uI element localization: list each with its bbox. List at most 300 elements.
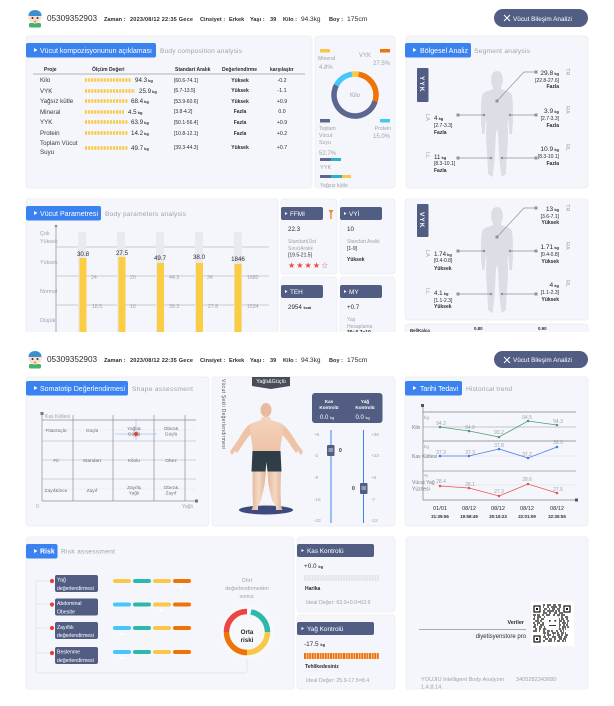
segment values: 1.74 kg (434, 251, 452, 258)
slider: muscle control: 0 (339, 448, 342, 454)
table rows: 94.3 kg (135, 77, 153, 84)
table rows: 63.9 kg (131, 119, 149, 126)
FFMI values: Sınır)Aralık (288, 246, 314, 252)
slider: muscle control: -16 (314, 497, 321, 502)
tab heading (405, 43, 471, 58)
somatotype grid: 0 (36, 504, 39, 510)
donut labels: 4.8% (319, 65, 333, 71)
side label (417, 68, 428, 102)
segment values: Yüksek (434, 266, 452, 272)
line chart: Vücut Yağ (412, 480, 435, 486)
button: body composition analysis (494, 351, 588, 368)
line chart: 94.2 (436, 421, 446, 427)
line chart: 22:01:09 (518, 514, 536, 519)
table rows (40, 77, 287, 156)
somatotype grid: Zayıf& (127, 485, 142, 491)
line chart: 38.0 (553, 440, 563, 446)
slider: fat control: -22 (371, 518, 378, 523)
MY values: 39+0.7x10 (347, 330, 371, 336)
ribbon: body type: Yağlı&Güçlü (256, 379, 286, 385)
table rows: +0.9 (277, 99, 287, 105)
table header: Proje (44, 67, 57, 73)
slider: fat control: +23 (371, 453, 379, 458)
segment values: [8.3-10.1] (434, 161, 456, 167)
bar chart: Düşük (40, 318, 56, 324)
risk rows: Yağ (57, 578, 66, 584)
line chart: 94.5 (522, 415, 532, 421)
line chart: 94.0 (465, 425, 475, 431)
line chart: 08/12 (550, 506, 564, 512)
donut labels: Mineral (318, 56, 335, 62)
table rows: Fazla (234, 120, 246, 126)
table rows: Yüksek (231, 99, 249, 105)
segment labels: RA (564, 106, 570, 114)
measurement summary: 175cm (347, 357, 368, 364)
measurement summary: Boy : (329, 17, 343, 23)
line chart: 28.4 (436, 479, 446, 485)
segment values: Fazla (546, 161, 559, 167)
measurement summary: Cinsiyet : (200, 358, 225, 364)
panel: body shape (212, 377, 395, 526)
somatotype grid: Zayıf&İnce (45, 487, 68, 494)
donut labels: Yağsız kütle (320, 183, 348, 189)
table rows: [10.8-12.1] (174, 131, 199, 137)
subheading: Risk assessment (61, 548, 115, 556)
icon: QR code (531, 602, 574, 646)
body silhouette (481, 207, 513, 313)
line chart: 28.1 (465, 482, 475, 488)
connector tree (36, 581, 247, 673)
risk rows: değerlendirmesi (57, 633, 94, 639)
donut labels: 15.0% (373, 134, 391, 140)
leader lines (456, 206, 538, 296)
tab heading: Somatotip Değerlendirmesi (40, 386, 125, 393)
donut labels (318, 49, 391, 189)
table rows: Yüksek (231, 88, 249, 94)
somatotype grid: Zayıf (166, 490, 177, 496)
bar chart: 10 (130, 304, 136, 310)
line chart: 08/12 (462, 506, 476, 512)
table rows: 25.9 kg (139, 88, 157, 95)
tab heading: Vücut kompozisyonunun açıklaması (40, 48, 152, 55)
ideal value: İdeal Değer: 25.9-17.5=8.4 (306, 677, 369, 684)
risk donut: riski (241, 637, 254, 644)
VYI values: Yüksek (347, 257, 365, 263)
header: page one (28, 9, 588, 28)
table rows: VYK (40, 88, 53, 95)
bar chart (40, 225, 269, 332)
segment labels: LA (424, 114, 430, 121)
panel: MY (340, 277, 395, 339)
measurement summary: 2023/08/12 22:35 Gece (130, 358, 193, 364)
risk rows: Beslenme (57, 650, 80, 656)
illustration: body model (230, 403, 303, 514)
risk donut: Orta (241, 629, 254, 636)
line chart: 19:58:49 (460, 514, 478, 519)
panel: waist-hip ratio (405, 324, 588, 340)
measurement summary: 2023/08/12 22:35 Gece (130, 17, 193, 23)
caption (225, 578, 269, 600)
somatotype grid: Obez (165, 458, 177, 464)
segment values: [8.3-10.1] (538, 154, 560, 160)
progress bar (304, 575, 379, 581)
subheading: Historical trend (466, 386, 512, 393)
measurement summary: Boy : (329, 358, 343, 364)
subheading: Segment analysis (474, 48, 531, 55)
segment values: Fazla (434, 130, 447, 136)
donut labels: 52.7% (319, 151, 337, 157)
segment labels (424, 68, 570, 158)
value: -17.5 kg (304, 641, 326, 648)
tab heading (26, 544, 58, 558)
measurement summary: 94.3kg (301, 16, 321, 23)
line chart: 01/01 (433, 506, 447, 512)
measurement summary (104, 16, 368, 23)
segment values: Fazla (546, 84, 559, 90)
donut labels: Kilo (350, 93, 361, 99)
FFMI values: Standart(Üst (288, 238, 317, 245)
subheading: Body composition analysis (160, 48, 243, 55)
FFMI values: [19.5-21.5] (288, 252, 313, 258)
line chart: 93.2 (494, 430, 504, 436)
table rows: -0.2 (278, 78, 287, 84)
table rows: Kilo (40, 77, 51, 84)
panel: historical trend (405, 377, 588, 526)
bar chart: 1534 (247, 304, 259, 310)
data label: Veriler (508, 620, 525, 626)
table rows: +0.9 (277, 120, 287, 126)
caption: sonra: (240, 594, 254, 600)
segment values: [0.4-0.8] (434, 258, 453, 264)
risk rows: Abdominal (57, 601, 82, 607)
side label (417, 204, 428, 237)
control summary: Yağ (361, 399, 369, 404)
segment values: [2.7-3.3] (541, 116, 560, 122)
somatotype grid: Kilolu (128, 458, 140, 464)
somatotype grid: Standart (83, 458, 102, 464)
slider: fat control: +8 (371, 475, 377, 480)
icon: avatar (28, 351, 42, 368)
bar chart: 20 (130, 275, 136, 281)
line chart: % (424, 473, 429, 479)
line chart: 94.3 (553, 419, 563, 425)
table header: Ölçüm Değeri (92, 66, 125, 73)
risk rows: Obesite (57, 610, 75, 616)
table rows: [53.9-60.6] (174, 99, 199, 105)
VYI values (347, 226, 380, 263)
subheading: Shape assessment (132, 386, 193, 393)
tab heading: VYİ (349, 209, 360, 218)
table rows: Toplam Vücut (40, 140, 78, 147)
bar chart: 44.3 (169, 275, 179, 281)
segment labels: TR (564, 204, 570, 211)
line chart: 22:35:55 (548, 514, 566, 519)
segment labels: RA (564, 242, 570, 250)
somatotype grid: Yağlı (129, 490, 139, 496)
segment values: 4 kg (550, 282, 560, 289)
line chart: 08/12 (491, 506, 505, 512)
somatotype grid: Obez& (164, 485, 179, 491)
vertical label: Vücut Şekli Değerlendirmesi (220, 379, 226, 449)
table rows: Fazla (234, 109, 246, 115)
table rows: +0.7 (277, 145, 287, 151)
bar chart: 27.8 (208, 304, 218, 310)
bar chart: 30.8 (77, 251, 90, 258)
donut labels: Protein (375, 126, 391, 132)
panel: segment analysis YYK (405, 36, 588, 188)
measurement summary: Erkek (229, 17, 245, 23)
button: body composition analysis: Vücut Bileşim Analizi (513, 16, 572, 23)
measurement summary: Yaşı : (250, 358, 265, 364)
panel: VYI (340, 199, 395, 274)
somatotype grid (36, 412, 198, 510)
segment values: [1.1-2.3] (434, 298, 453, 304)
somatotype grid: Kas Kütlesi (45, 414, 70, 420)
table rows: 68.4 kg (131, 98, 149, 105)
segment values: 4.1 kg (434, 290, 449, 297)
risk rows: değerlendirmesi (57, 658, 94, 664)
control summary: Kas (325, 399, 334, 404)
segment values: [0.4-0.8] (541, 252, 560, 258)
segment values: [2.7-3.3] (434, 123, 453, 129)
star rating: ★★★★☆ (288, 261, 329, 270)
tab heading: TEH (290, 289, 303, 296)
organization: diyetisyenstore pro (476, 634, 527, 640)
bar chart: 38.0 (193, 254, 206, 261)
panel: FFMI (281, 199, 337, 274)
table rows: +0.2 (277, 131, 287, 137)
table rows: Yüksek (231, 145, 249, 151)
MY values (347, 304, 373, 336)
table header (44, 66, 294, 73)
segment labels: RL (564, 144, 570, 151)
segment values: Yüksek (541, 259, 559, 265)
somatotype grid: Yağlı& (127, 426, 142, 432)
table rows: [60.6-74.1] (174, 78, 199, 84)
risk rows (50, 575, 191, 664)
line chart: 27.3 (494, 489, 504, 495)
table rows: Yüksek (231, 78, 249, 84)
donut labels: Vücut (319, 133, 333, 139)
panel: waist-hip ratio: Bel/Kalça (410, 328, 430, 333)
line chart: Yüzdesi (412, 486, 430, 492)
risk donut (220, 605, 274, 659)
table rows: 0.0 (278, 109, 286, 115)
table rows: 49.7 kg (131, 145, 149, 152)
panel: muscle control (297, 537, 395, 612)
tab heading: Kas Kontrolü (307, 548, 344, 555)
somatotype grid: Zayıf (87, 488, 98, 494)
VYI values: [1-9] (347, 246, 358, 252)
VYI values: 10 (347, 226, 354, 233)
slider: fat control: 0 (352, 486, 355, 492)
bar chart: 18.5 (92, 304, 102, 310)
segment values: 11 kg (434, 154, 447, 161)
bar chart: Çok (40, 231, 50, 237)
tab heading: Risk (40, 548, 55, 556)
table rows: Suyu (40, 149, 55, 156)
measurement summary: Cinsiyet : (200, 17, 225, 23)
control summary: Kontrolü (319, 405, 339, 410)
footer text (421, 677, 556, 690)
bar chart: 39.3 (169, 304, 179, 310)
table rows: Fazla (234, 131, 246, 137)
measurement summary: 94.3kg (301, 357, 321, 364)
line chart: 27.5 (553, 487, 563, 493)
line chart (412, 404, 578, 519)
status: Tehlikedesiniz (305, 664, 339, 670)
slider: fat control: +38 (371, 432, 379, 437)
segment labels: LA (424, 250, 430, 257)
somatotype grid: Güçlü (86, 428, 99, 434)
measurement summary: 39 (270, 358, 276, 364)
button: body composition analysis (494, 9, 588, 27)
panel: body composition (26, 36, 312, 188)
segment values: [22.8-27.6] (535, 78, 560, 84)
MY values: Hesaplama (347, 324, 373, 330)
somatotype grid: Güçlü (165, 432, 178, 438)
line chart: 37.8 (494, 443, 504, 449)
phone number: 05309352903 (47, 14, 98, 23)
segment values: 1.71 kg (540, 244, 560, 251)
measurement summary: Erkek (229, 358, 245, 364)
slider: muscle control: -9 (314, 475, 319, 480)
bar chart: 1680 (247, 275, 259, 281)
measurement summary: 39 (270, 17, 276, 23)
donut labels: YYK (320, 165, 331, 171)
line chart: 21:39:56 (431, 514, 449, 519)
segment labels: LL (424, 152, 430, 158)
control summary: Kontrolü (355, 405, 375, 410)
caption: Dört (242, 578, 253, 584)
segment values: Fazla (546, 123, 559, 129)
tab heading: MY (349, 289, 359, 296)
segment labels: RL (564, 280, 570, 287)
somatotype grid: Obez& (164, 426, 179, 432)
status: Harika (305, 586, 321, 592)
segment values: 13 kg (546, 206, 560, 213)
bar chart: Yüksek (40, 239, 58, 245)
segment values: 29.8 kg (540, 70, 560, 77)
segment values: 10.9 kg (540, 146, 560, 153)
segment values: [1.1-2.3] (541, 290, 560, 296)
line chart: 37.3 (436, 450, 446, 456)
line chart: 37.3 (465, 450, 475, 456)
table rows: [6.7-13.5] (174, 88, 196, 94)
footer text: 1.4.8.14 (421, 684, 441, 690)
side label: VYK (418, 212, 425, 229)
tab heading: FFMI (290, 211, 305, 218)
measurement summary: Zaman : (104, 358, 126, 364)
tab heading: Tarihi Tedavi (420, 386, 458, 393)
measurement summary: 175cm (347, 16, 368, 23)
tab heading (26, 381, 128, 396)
slider: muscle control: +6 (314, 432, 320, 437)
measurement summary: Yaşı : (250, 17, 265, 23)
donut labels: 27.5% (373, 61, 391, 67)
subheading: Body parameters analysis (105, 211, 187, 218)
segment values: 4 kg (434, 115, 444, 122)
icon: avatar (28, 10, 42, 28)
control summary: 0.0 kg (320, 415, 334, 421)
body silhouette (481, 71, 513, 177)
VYI values: Standart Aralık (347, 239, 380, 245)
side label: YYK (418, 76, 425, 93)
segment labels (424, 204, 570, 294)
MY values: +0.7 (347, 304, 360, 311)
value: +0.0 kg (304, 563, 324, 570)
tab heading (26, 206, 101, 220)
leader lines (456, 70, 538, 160)
measurement summary: Zaman : (104, 17, 126, 23)
footer text: YOUJIU Intelligent Body Analyzer (421, 677, 504, 683)
slider: muscle control: -2 (314, 453, 319, 458)
table header: Değerlendirme (222, 67, 257, 73)
table rows: 4.5 kg (128, 109, 143, 116)
line chart: 08/12 (520, 506, 534, 512)
line chart: 28.6 (522, 477, 532, 483)
line chart: 37.2 (522, 452, 532, 458)
somatotype grid: Yağlı (182, 504, 193, 510)
table rows: Mineral (40, 109, 60, 116)
panel: somatotype assessment (26, 377, 209, 526)
segment values (434, 70, 560, 174)
bar chart: Yüksek (40, 260, 58, 266)
tab heading: Bölgesel Analiz (420, 48, 468, 55)
segment values: 3.9 kg (544, 108, 560, 115)
control summary: 0.0 kg (356, 415, 370, 421)
line chart: Kilo (412, 425, 421, 431)
segment values: Yüksek (541, 297, 559, 303)
caption: değerlendirmeden (225, 586, 269, 592)
somatotype grid: Fit&Güçlü (45, 428, 67, 434)
ribbon: body type (252, 377, 290, 389)
segment labels: LL (424, 288, 430, 294)
phone number: 05309352903 (47, 355, 98, 364)
segment values: Yüksek (434, 304, 452, 310)
somatotype grid: Güçlü (128, 432, 141, 438)
line chart: kg (424, 444, 429, 450)
slider: muscle control (314, 430, 342, 523)
table rows: [3.8-4.2] (174, 109, 193, 115)
tab heading: Vücut Parametresi (40, 211, 98, 218)
measurement summary: Kilo : (283, 358, 297, 364)
footer text: 3405282343680 (516, 677, 556, 683)
table rows: Protein (40, 130, 60, 137)
segment values: Yüksek (541, 220, 559, 226)
segment values (434, 206, 560, 310)
donut labels: Suyu (319, 140, 331, 146)
table header: karşılaştır (270, 67, 294, 73)
table header: Standart Aralık (175, 67, 211, 73)
table rows: [39.3-44.3] (174, 145, 199, 151)
line chart: 20:15:23 (489, 514, 507, 519)
icon: pin (328, 210, 334, 219)
risk rows: Zayıflık (57, 625, 74, 631)
header: page two (28, 351, 588, 368)
bar chart: 34 (207, 275, 213, 281)
donut chart (326, 66, 384, 124)
control summary (312, 393, 382, 423)
segment values: [3.6-7.1] (541, 214, 560, 220)
panel: waist-hip ratio: 0.80 (474, 326, 483, 331)
panel: segment analysis VYK (405, 199, 588, 320)
panel: composition donut (315, 36, 395, 189)
table rows: 14.2 kg (131, 130, 149, 137)
table rows: Yağsız kütle (40, 98, 74, 105)
panel: risk assessment (26, 537, 294, 689)
risk rows: değerlendirmesi (57, 586, 94, 592)
